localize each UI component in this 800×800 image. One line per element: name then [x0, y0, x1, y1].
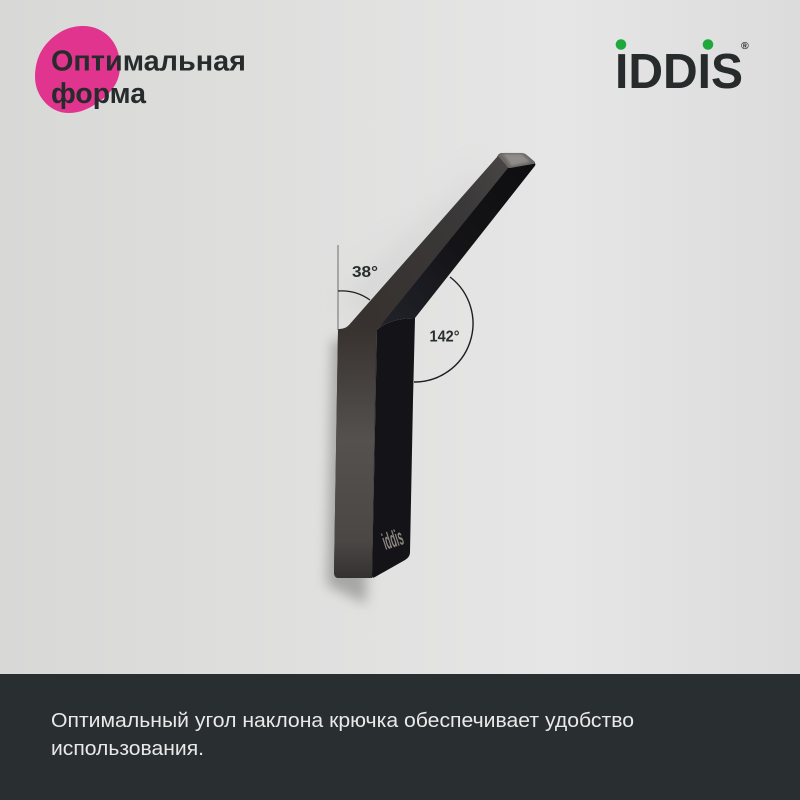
hook lower side face	[334, 328, 376, 578]
hook shadow	[327, 170, 490, 604]
title	[51, 46, 246, 110]
label 38: 38°	[352, 264, 378, 281]
hook tip highlight	[502, 154, 530, 166]
engraved brand on hook: iddis	[379, 524, 407, 555]
label 142: 142°	[430, 328, 460, 346]
arc 142	[414, 277, 473, 382]
bottom caption bar	[0, 674, 800, 800]
pink blob	[35, 26, 120, 113]
hook illustration	[334, 153, 535, 578]
title: Оптимальная	[51, 46, 246, 78]
hook tip bevel	[498, 153, 535, 168]
hook side face upper	[334, 153, 512, 578]
caption text	[51, 709, 634, 760]
IDDIS logo: IDDIS	[615, 45, 743, 99]
caption text: использования.	[51, 737, 204, 760]
logo green dot left	[616, 39, 626, 50]
logo green dot right	[703, 39, 713, 50]
angle 142 degrees annotation	[414, 277, 473, 382]
angle 38 degrees annotation	[338, 245, 378, 330]
title: форма	[51, 78, 147, 110]
vertical reference line	[337, 245, 339, 330]
registered mark: ®	[741, 40, 749, 52]
caption text: Оптимальный угол наклона крючка обеспечивает удобство	[51, 709, 634, 732]
arc 38	[338, 291, 370, 300]
hook dark front band	[377, 162, 535, 330]
hook dark front face lower	[372, 318, 415, 578]
